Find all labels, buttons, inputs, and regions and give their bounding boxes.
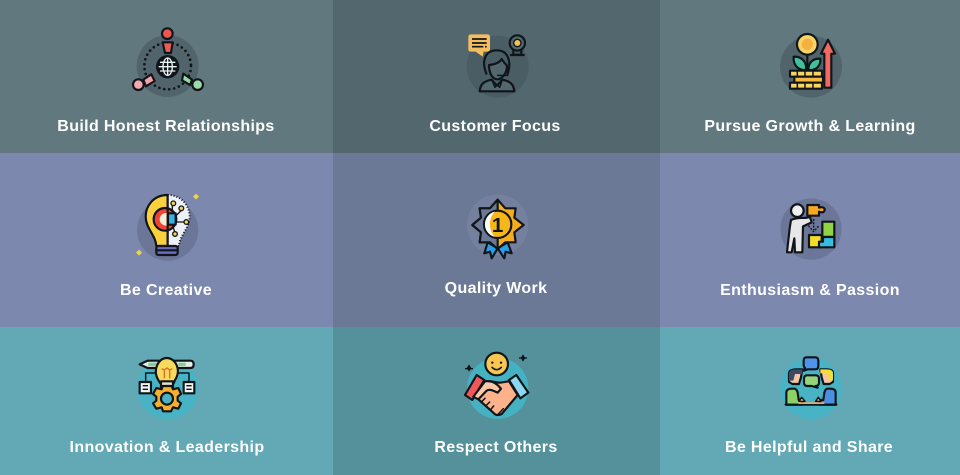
panel: Respect Others <box>333 327 660 475</box>
panel: Be Helpful and Share <box>660 327 960 475</box>
label: Customer Focus <box>429 118 561 135</box>
label: Respect Others <box>434 439 558 456</box>
label: Quality Work <box>445 280 547 297</box>
icon: customer support agent <box>467 34 529 98</box>
panel: Innovation & Leadership <box>0 327 333 475</box>
icon: two people talking <box>780 357 842 419</box>
icon: bulb pencil and gear <box>137 358 198 419</box>
panel: Be Creative <box>0 153 333 327</box>
panel: Pursue Growth & Learning <box>660 0 960 153</box>
icon: handshake and smiley <box>465 353 528 419</box>
panel: Quality Work <box>333 153 660 327</box>
panel: Build Honest Relationships <box>0 0 333 153</box>
label: Be Creative <box>120 282 212 299</box>
panel: Customer Focus <box>333 0 660 153</box>
icon: person assembling puzzle <box>780 198 842 260</box>
panel: Enthusiasm & Passion <box>660 153 960 327</box>
label: Pursue Growth & Learning <box>704 118 916 135</box>
label: Enthusiasm & Passion <box>720 282 900 299</box>
icon: people around globe <box>133 28 203 97</box>
icon: half gear half circuit bulb <box>136 194 199 261</box>
label: Build Honest Relationships <box>57 118 275 135</box>
label: Be Helpful and Share <box>725 439 893 456</box>
icon: first place rosette: 1 <box>492 214 503 237</box>
icon: coin plant and arrow <box>780 34 842 98</box>
label: Innovation & Leadership <box>70 439 264 456</box>
icon: first place rosette <box>467 194 528 258</box>
